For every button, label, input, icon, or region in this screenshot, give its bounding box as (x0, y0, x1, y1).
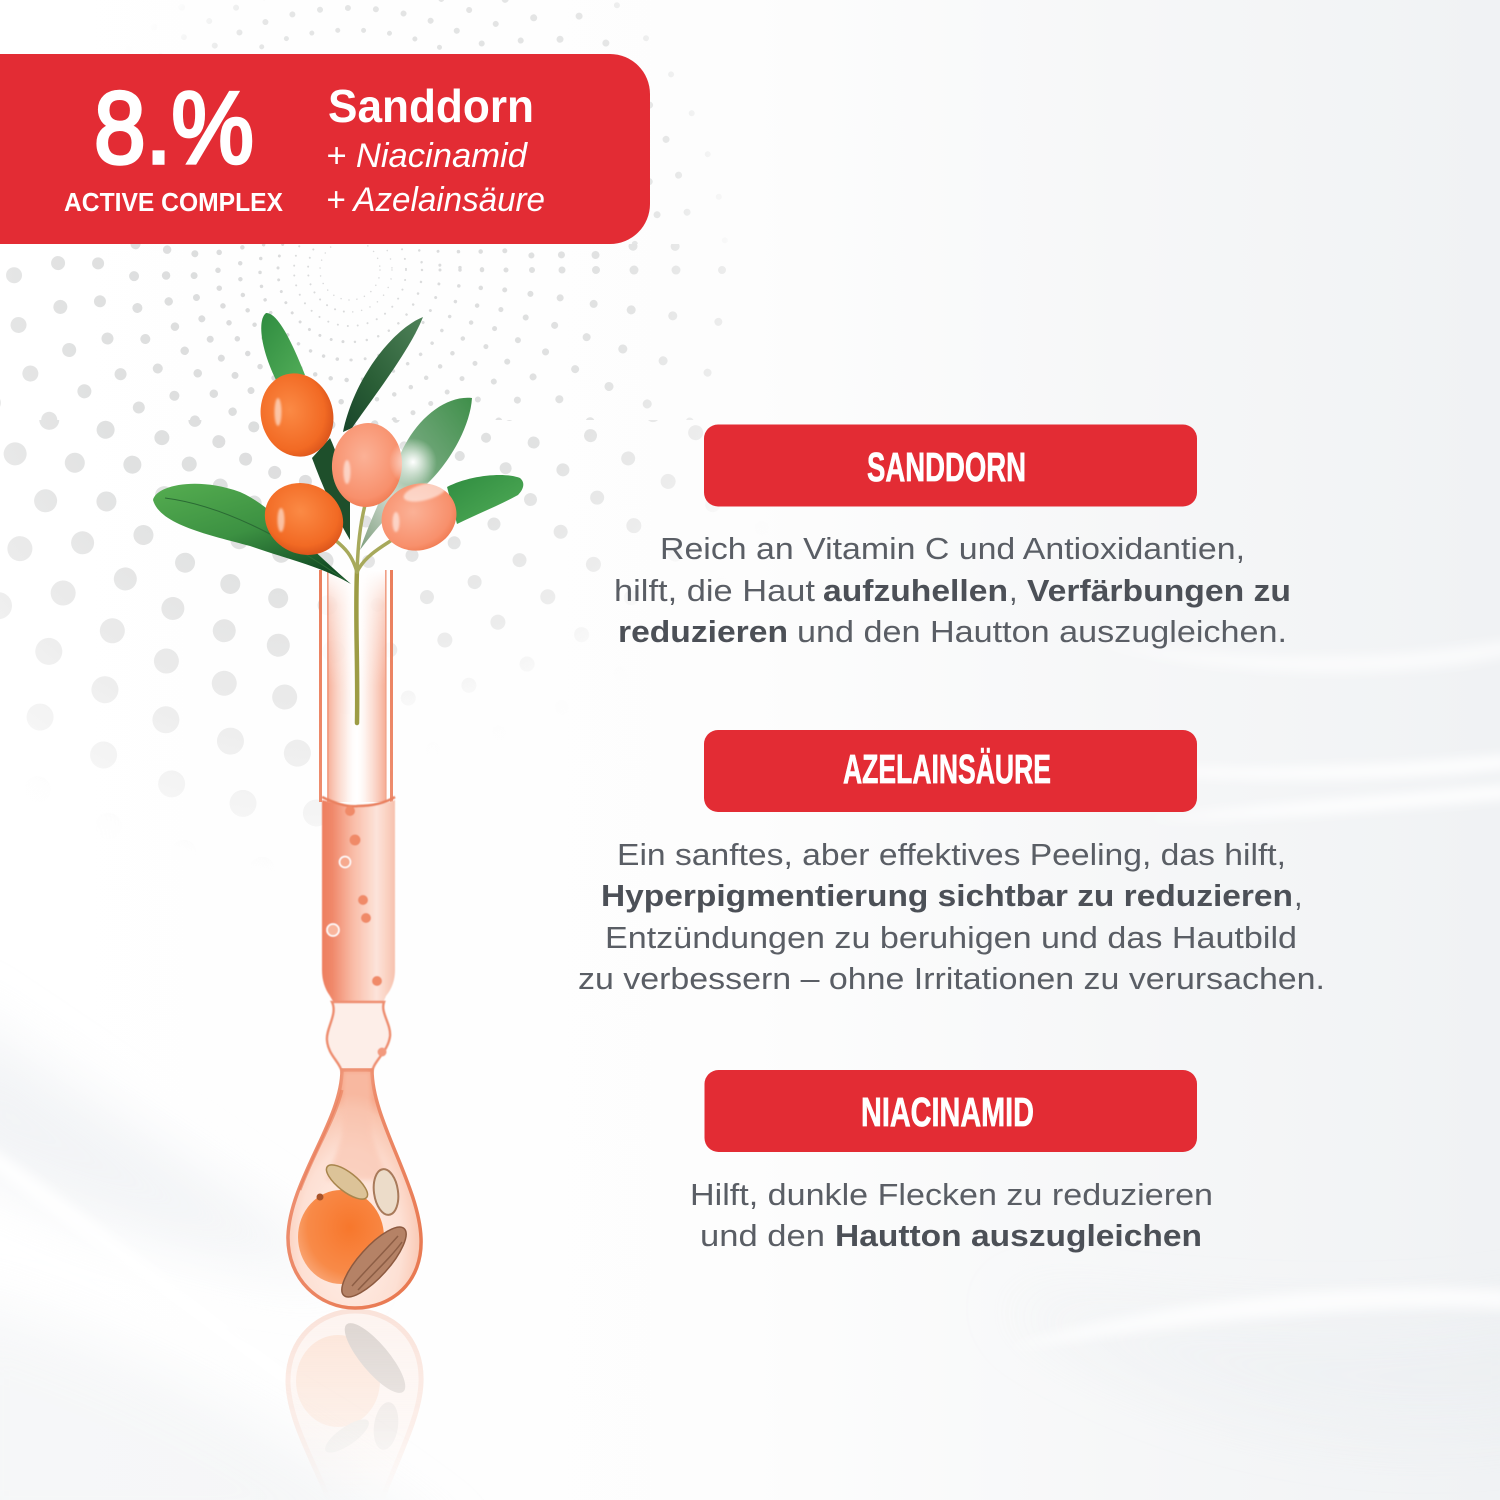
icon: brown seed (333, 1219, 415, 1305)
icon: oval seed (371, 1168, 401, 1216)
heading bar: AZELAINSÄURE (843, 746, 1051, 792)
leaves (153, 313, 523, 584)
banner: 8.% active complex (0, 54, 650, 244)
berries (251, 365, 466, 568)
ingredient list: + Azelainsäure (326, 181, 545, 219)
panel: azelainsäure (578, 730, 1325, 996)
sea buckthorn sprig (153, 313, 523, 723)
body text: , (1294, 878, 1303, 913)
body text (690, 1177, 1213, 1253)
icon: pale seed (321, 1159, 373, 1205)
body text: Verfärbungen zu (1027, 573, 1291, 608)
heading bar: SANDDORN (867, 444, 1026, 490)
body text: und den (700, 1218, 825, 1253)
heading bar (704, 730, 1197, 812)
body text: zu verbessern – ohne Irritationen zu verursachen. (578, 961, 1325, 996)
liquid column (322, 797, 395, 1003)
body text: Hilft, dunkle Flecken zu reduzieren (690, 1177, 1213, 1212)
body text: hilft, die Haut (614, 573, 815, 608)
light flare (389, 438, 437, 486)
body text (614, 531, 1291, 649)
branches (335, 505, 395, 572)
body text: reduzieren (618, 614, 788, 649)
teardrop with fruit and seeds (288, 1070, 421, 1308)
body text (578, 837, 1325, 996)
active complex label: ACTIVE COMPLEX (64, 187, 284, 217)
body text: Ein sanftes, aber effektives Peeling, das hilft, (617, 837, 1286, 872)
heading bar (704, 424, 1197, 506)
body text: Entzündungen zu beruhigen und das Hautbild (605, 920, 1297, 955)
body text: und den Hautton auszugleichen. (797, 614, 1287, 649)
ingredient list (326, 80, 545, 219)
body text: Reich an Vitamin C und Antioxidantien, (660, 531, 1245, 566)
neck bulb (327, 1002, 390, 1072)
stem (354, 570, 359, 723)
halftone dot pattern (0, 0, 956, 876)
panel: niacinamid (690, 1070, 1213, 1253)
big percentage: 8.% (94, 71, 254, 185)
icon: sea buckthorn fruit (298, 1190, 384, 1284)
heading bar (704, 1070, 1197, 1152)
heading bar: NIACINAMID (861, 1089, 1034, 1135)
ingredient list: Sanddorn (328, 80, 534, 132)
body text: , (1009, 573, 1018, 608)
panel: sanddorn (614, 424, 1291, 649)
dropper: glass tube with liquid and drop (288, 570, 421, 1500)
body text: Hautton auszugleichen (835, 1218, 1202, 1253)
body text: Hyperpigmentierung sichtbar zu reduzieren (601, 878, 1293, 913)
upper glass tube (319, 570, 393, 802)
ingredient list: + Niacinamid (326, 137, 528, 175)
body text: aufzuhellen (823, 573, 1008, 608)
reflection of the drop (286, 1309, 424, 1468)
